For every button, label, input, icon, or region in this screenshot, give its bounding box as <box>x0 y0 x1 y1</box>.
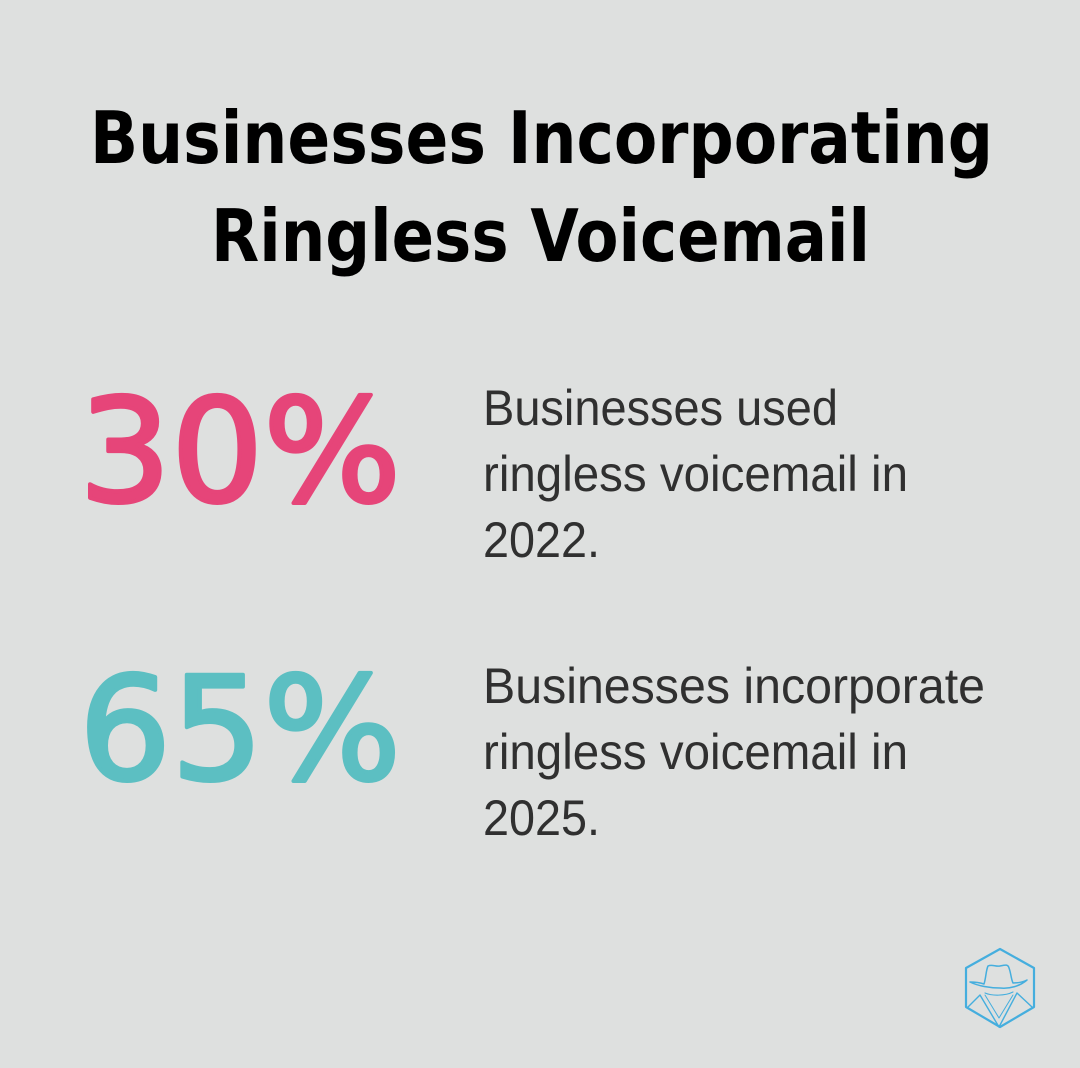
description: 2022: ringless voicemail in <box>483 446 908 502</box>
description: 2025 <box>483 658 985 846</box>
description: 2022 <box>483 380 908 568</box>
statistic: 65%: 65% <box>79 646 401 813</box>
description: 2025: Businesses incorporate <box>483 658 985 714</box>
description: 2022: Businesses used <box>483 380 838 436</box>
icon: hexagon logo with hat and collar <box>966 949 1034 1027</box>
description: 2025: ringless voicemail in <box>483 724 908 780</box>
statistic: 30%: 30% <box>79 368 401 535</box>
description: 2022: 2022. <box>483 512 600 568</box>
description: 2025: 2025. <box>483 790 600 846</box>
title <box>90 96 993 278</box>
title: Ringless Voicemail <box>211 194 870 278</box>
